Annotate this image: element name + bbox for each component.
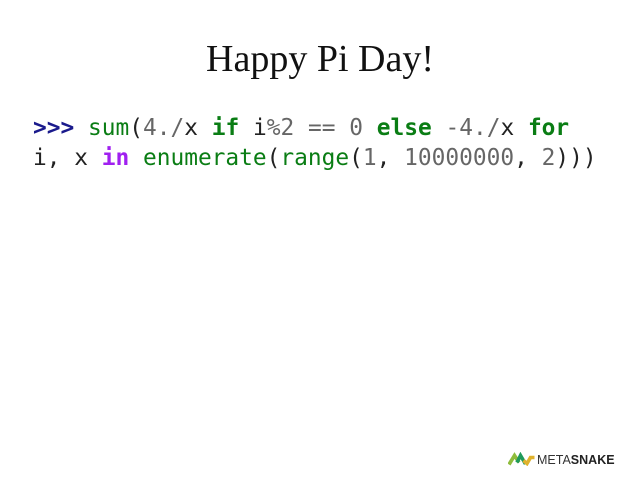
icon: logo mark [508, 452, 534, 466]
wordmark: METASNAKE [537, 453, 615, 467]
code block [33, 115, 597, 171]
code line 1: >>> sum(4./x if i%2 == 0 else -4./x for [33, 115, 569, 141]
logo: Metasnake [508, 452, 615, 467]
code line 2: i, x in enumerate(range(1, 10000000, 2))) [33, 145, 597, 171]
title: Happy Pi Day! [206, 38, 434, 80]
